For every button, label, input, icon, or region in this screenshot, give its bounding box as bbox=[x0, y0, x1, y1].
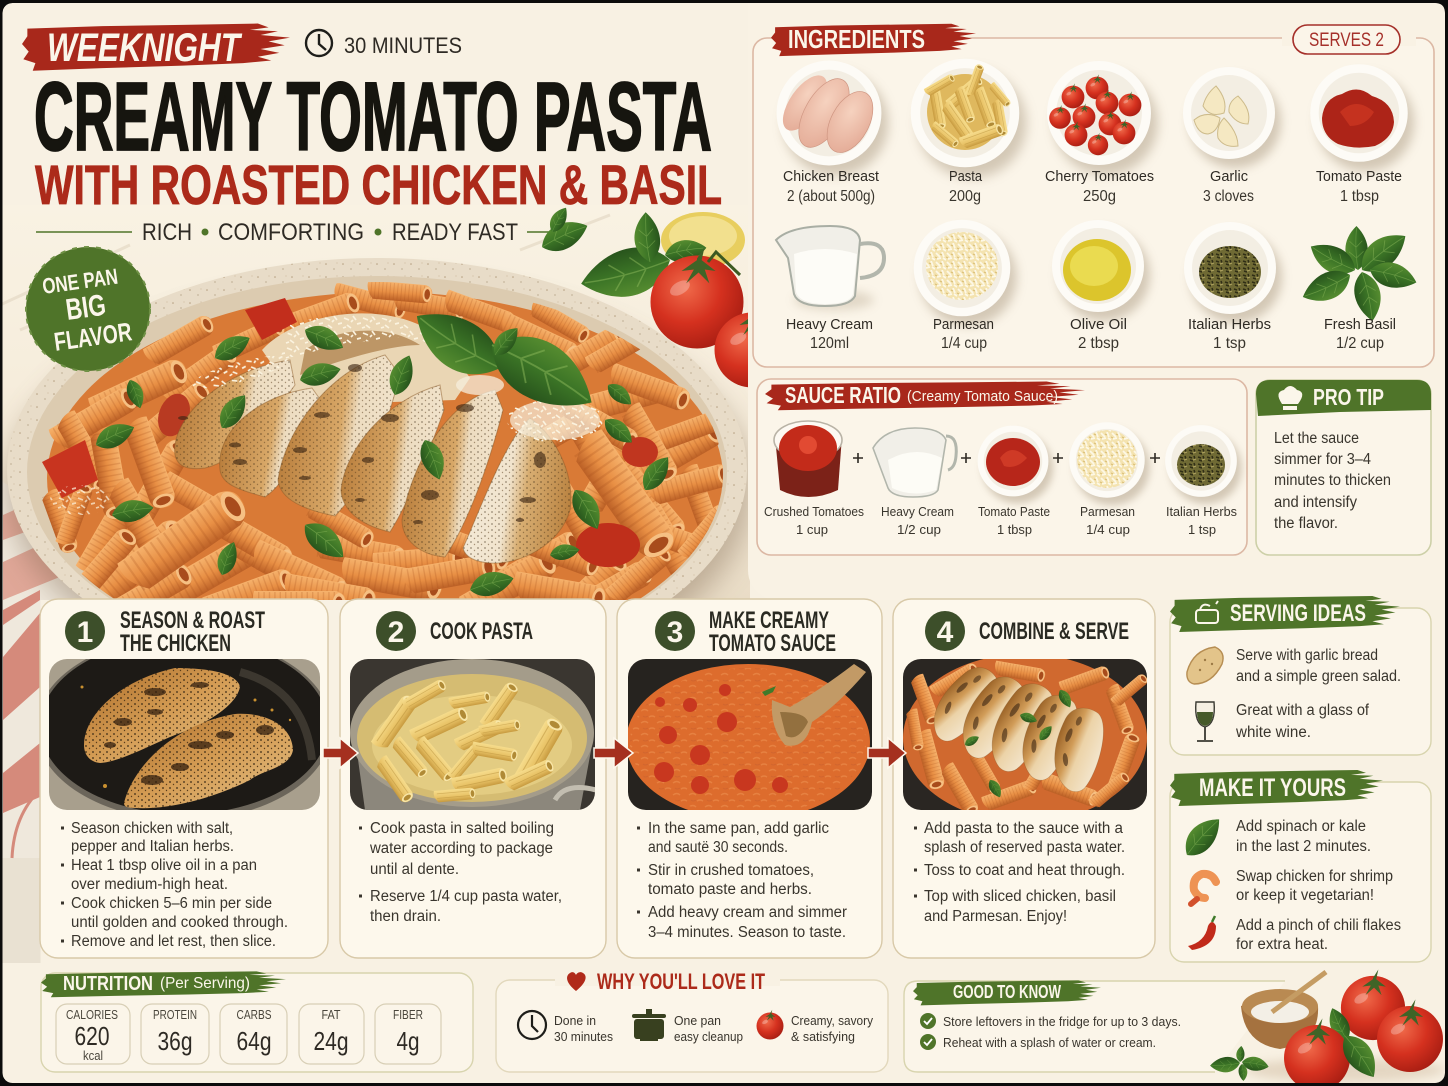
stat: protein: PROTEIN bbox=[153, 1008, 197, 1022]
sauce ratio heading bbox=[765, 382, 1085, 410]
ingredient: fresh basil bbox=[1298, 224, 1420, 352]
tagline bbox=[36, 204, 592, 258]
ingredient: pasta: Pasta bbox=[949, 168, 983, 185]
stat: calories: CALORIES bbox=[66, 1008, 118, 1022]
step 1 instructions: Remove and let rest, then slice. bbox=[71, 933, 276, 950]
tea towel bbox=[2, 482, 82, 600]
ingredient: cherry tomatoes: Cherry Tomatoes bbox=[1045, 168, 1154, 185]
stat: fiber: FIBER bbox=[393, 1008, 423, 1022]
step 1 instructions: pepper and Italian herbs. bbox=[71, 838, 234, 855]
reason: fast bbox=[554, 1013, 613, 1044]
badge: one pan big flavor: BIG bbox=[64, 289, 108, 327]
panel: why you'll love it bbox=[496, 969, 888, 1072]
ratio: tomato paste: 1 tbsp bbox=[997, 522, 1032, 537]
ingredient: parmesan bbox=[914, 220, 1017, 352]
reason: creamy: Creamy, savory bbox=[791, 1013, 873, 1028]
ratio: heavy cream: 1/2 cup bbox=[897, 522, 941, 537]
serving idea 1 text bbox=[1236, 647, 1401, 685]
step 2 instructions: until al dente. bbox=[370, 861, 459, 878]
nutrition heading: (Per Serving) bbox=[160, 975, 250, 992]
icon: clock bbox=[306, 30, 332, 56]
step 4 number bbox=[925, 611, 965, 651]
tip: shrimp: Swap chicken for shrimp bbox=[1236, 868, 1393, 885]
pro tip text: minutes to thicken bbox=[1274, 472, 1391, 489]
tagline: READY FAST bbox=[392, 219, 518, 246]
arrow: step 1 to 2 bbox=[323, 738, 358, 768]
ratio: parmesan bbox=[1069, 422, 1150, 537]
pro tip text: simmer for 3–4 bbox=[1274, 451, 1371, 468]
panel: step 1 bbox=[36, 599, 332, 958]
stat: fat bbox=[299, 1004, 364, 1064]
step 3 number: 3 bbox=[667, 616, 683, 649]
ratio: crushed tomatoes: 1 cup bbox=[796, 522, 828, 537]
step 2 photo: pasta in pot bbox=[350, 659, 596, 810]
ingredient: tomato paste bbox=[1310, 64, 1414, 205]
step 3 photo: sauce in pan bbox=[626, 659, 872, 820]
weeknight banner: WEEKNIGHT bbox=[47, 26, 243, 70]
tip: chili: Add a pinch of chili flakes bbox=[1236, 917, 1401, 934]
icon: chili bbox=[1188, 916, 1216, 950]
ingredient: parmesan: Parmesan bbox=[933, 316, 994, 333]
tip: chili: for extra heat. bbox=[1236, 936, 1328, 953]
step 2 instructions: then drain. bbox=[370, 908, 441, 925]
stat: calories bbox=[56, 1004, 130, 1064]
step 1 photo: chicken in pan bbox=[49, 659, 320, 810]
ingredient: parmesan: 1/4 cup bbox=[941, 335, 987, 352]
arrow: step 2 to 3 bbox=[594, 738, 633, 768]
tagline: RICH bbox=[142, 219, 192, 246]
icon: tomato bbox=[756, 1010, 784, 1040]
towel lower strip bbox=[2, 590, 40, 963]
pro tip text bbox=[1274, 430, 1391, 532]
stat: fat: FAT bbox=[322, 1008, 341, 1022]
serves badge: SERVES 2 bbox=[1309, 30, 1384, 51]
tip: spinach: Add spinach or kale bbox=[1236, 818, 1366, 835]
step 4 instructions: Toss to coat and heat through. bbox=[924, 862, 1125, 879]
icon: shrimp bbox=[1191, 874, 1216, 904]
icon: spinach leaf bbox=[1177, 811, 1228, 863]
step 3 instructions: Stir in crushed tomatoes, bbox=[648, 862, 814, 879]
step 3 instructions: 3–4 minutes. Season to taste. bbox=[648, 924, 846, 941]
serving idea 2 text bbox=[1235, 702, 1370, 741]
basil on top bbox=[416, 314, 498, 374]
step 4 instructions: Top with sliced chicken, basil bbox=[924, 888, 1116, 905]
icon: clock bbox=[518, 1011, 546, 1039]
step 2 number bbox=[376, 611, 416, 651]
icon: pot bbox=[632, 1009, 666, 1041]
step 1 number: 1 bbox=[77, 616, 93, 649]
ratio: tomato paste bbox=[978, 426, 1053, 537]
reason: one pan: One pan bbox=[674, 1013, 721, 1028]
panel: serving ideas bbox=[1170, 596, 1431, 755]
step 1 instructions bbox=[61, 820, 288, 950]
panel: pro tip bbox=[1256, 380, 1431, 555]
pro tip heading bbox=[1256, 380, 1431, 416]
stat: fiber bbox=[375, 1004, 441, 1064]
ingredient: heavy cream bbox=[776, 226, 884, 352]
why heading: WHY YOU'LL LOVE IT bbox=[597, 969, 765, 994]
ingredient: chicken breast: 2 (about 500g) bbox=[787, 188, 875, 205]
step 4 instructions bbox=[914, 820, 1125, 925]
ratio: italian herbs: Italian Herbs bbox=[1166, 504, 1237, 519]
plus signs bbox=[853, 453, 1160, 463]
stat: protein: 36g bbox=[158, 1026, 192, 1056]
serves badge bbox=[1293, 25, 1400, 54]
reason: creamy bbox=[791, 1013, 873, 1044]
step 1 number bbox=[65, 611, 105, 651]
ratio: crushed tomatoes: Crushed Tomatoes bbox=[764, 504, 864, 519]
stat: carbs bbox=[220, 1004, 287, 1064]
ingredient: cherry tomatoes bbox=[1045, 61, 1158, 205]
pro tip heading: PRO TIP bbox=[1313, 384, 1384, 410]
step 3 instructions: and sautë 30 seconds. bbox=[648, 839, 788, 856]
stat: calories: 620 bbox=[74, 1021, 110, 1051]
ingredient: heavy cream: Heavy Cream bbox=[786, 316, 873, 333]
step 4 instructions: Add pasta to the sauce with a bbox=[924, 820, 1123, 837]
icon: heart bbox=[567, 972, 586, 991]
bowl bbox=[7, 258, 747, 600]
stat: protein bbox=[141, 1004, 209, 1064]
step 1 instructions: Heat 1 tbsp olive oil in a pan bbox=[71, 857, 257, 874]
ingredient: tomato paste: 1 tbsp bbox=[1340, 188, 1379, 205]
time label: 30 MINUTES bbox=[344, 33, 462, 58]
ingredient: olive oil: Olive Oil bbox=[1070, 316, 1127, 333]
tip: shrimp bbox=[1236, 868, 1393, 904]
ingredient: olive oil: 2 tbsp bbox=[1078, 335, 1119, 352]
step 3 instructions: In the same pan, add garlic bbox=[648, 820, 829, 837]
good to know heading bbox=[913, 980, 1101, 1005]
chicken slices bbox=[170, 313, 580, 570]
step 3 heading: MAKE CREAMY bbox=[709, 607, 829, 634]
serving idea 2 text: Great with a glass of bbox=[1236, 702, 1370, 719]
serving idea 1 text: Serve with garlic bread bbox=[1236, 647, 1378, 664]
pro tip text: and intensify bbox=[1274, 494, 1357, 511]
panel: ingredients bbox=[753, 24, 1434, 367]
serving idea 2 text: white wine. bbox=[1235, 724, 1311, 741]
panel: sauce ratio bbox=[757, 379, 1247, 555]
ratio: italian herbs: 1 tsp bbox=[1188, 522, 1216, 537]
panel: good to know bbox=[904, 980, 1285, 1072]
tomato chunks bbox=[245, 298, 297, 340]
step 2 instructions: water according to package bbox=[369, 840, 553, 857]
panel: make it yours bbox=[1170, 770, 1431, 962]
step 3 heading: TOMATO SAUCE bbox=[709, 630, 836, 657]
ingredient: italian herbs: 1 tsp bbox=[1213, 335, 1246, 352]
stat: fiber: 4g bbox=[396, 1026, 420, 1056]
tip: shrimp: or keep it vegetarian! bbox=[1236, 887, 1374, 904]
ratio: heavy cream bbox=[873, 428, 956, 537]
reason: fast: Done in bbox=[554, 1013, 596, 1028]
tip: spinach bbox=[1236, 818, 1371, 855]
step 2 instructions: Cook pasta in salted boiling bbox=[370, 820, 554, 837]
right column backdrop bbox=[748, 3, 1445, 600]
step 4 number: 4 bbox=[937, 616, 954, 649]
pro tip text: the flavor. bbox=[1274, 515, 1338, 532]
serving idea 1 text: and a simple green salad. bbox=[1236, 668, 1401, 685]
ingredient: garlic: Garlic bbox=[1210, 168, 1248, 185]
tip: store leftovers: Store leftovers in the fridge for up to 3 days. bbox=[943, 1014, 1181, 1029]
step 1 instructions: over medium-high heat. bbox=[71, 876, 228, 893]
reason: one pan: easy cleanup bbox=[674, 1029, 743, 1044]
title: CREAMY TOMATO PASTA bbox=[34, 62, 712, 171]
ratio: italian herbs bbox=[1165, 425, 1242, 537]
ingredient: chicken breast: Chicken Breast bbox=[783, 168, 880, 185]
step 4 instructions: and Parmesan. Enjoy! bbox=[924, 908, 1067, 925]
tip: reheat: Reheat with a splash of water or cream. bbox=[943, 1035, 1156, 1050]
step 1 instructions: Season chicken with salt, bbox=[71, 820, 233, 837]
ingredient: italian herbs bbox=[1184, 222, 1282, 352]
make it yours heading: MAKE IT YOURS bbox=[1199, 774, 1346, 802]
reason: one pan bbox=[674, 1013, 743, 1044]
panel: step 4 bbox=[893, 599, 1155, 958]
ingredient: cherry tomatoes: 250g bbox=[1083, 188, 1116, 205]
hero photo: pasta bowl bbox=[2, 212, 750, 600]
badge: one pan big flavor bbox=[26, 247, 150, 371]
step 3 instructions bbox=[637, 820, 847, 941]
step 2 instructions bbox=[359, 820, 562, 925]
nutrition heading bbox=[41, 971, 286, 997]
arrow: step 3 to 4 bbox=[868, 738, 906, 768]
step 2 instructions: Reserve 1/4 cup pasta water, bbox=[370, 888, 562, 905]
step 1 heading: THE CHICKEN bbox=[120, 630, 231, 657]
step 4 heading: COMBINE & SERVE bbox=[979, 618, 1129, 645]
ratio: parmesan: Parmesan bbox=[1080, 504, 1135, 519]
sauce ratio heading: (Creamy Tomato Sauce) bbox=[907, 388, 1058, 405]
herbs and tomatoes behind bowl bbox=[581, 212, 748, 388]
step 4 photo: finished pasta bbox=[903, 659, 1147, 810]
badge: one pan big flavor: FLAVOR bbox=[52, 316, 134, 357]
ingredient: garlic: 3 cloves bbox=[1203, 188, 1254, 205]
step 1 instructions: Cook chicken 5–6 min per side bbox=[71, 895, 272, 912]
stat: fat: 24g bbox=[314, 1026, 348, 1056]
panel: step 2 bbox=[340, 599, 606, 958]
step 3 heading bbox=[709, 607, 836, 657]
stat: calories: kcal bbox=[83, 1049, 103, 1063]
tip: chili bbox=[1236, 917, 1401, 953]
step 1 instructions: until golden and cooked through. bbox=[71, 914, 288, 931]
panel: step 3 bbox=[617, 599, 882, 958]
reason: creamy: & satisfying bbox=[791, 1029, 855, 1044]
ratio: parmesan: 1/4 cup bbox=[1086, 522, 1130, 537]
badge: one pan big flavor: ONE PAN bbox=[41, 264, 119, 299]
tagline: COMFORTING bbox=[218, 219, 364, 246]
serving ideas heading bbox=[1170, 596, 1400, 632]
stat: carbs: 64g bbox=[236, 1026, 272, 1056]
ingredient: olive oil bbox=[1052, 220, 1150, 352]
ratio: crushed tomatoes bbox=[764, 421, 864, 537]
icon: wine glass bbox=[1196, 702, 1214, 741]
ingredient: heavy cream: 120ml bbox=[810, 335, 849, 352]
good to know heading: GOOD TO KNOW bbox=[953, 982, 1061, 1002]
icon: garlic bread bbox=[1187, 647, 1223, 684]
reason: fast: 30 minutes bbox=[554, 1029, 613, 1044]
step 1 heading: SEASON & ROAST bbox=[120, 607, 265, 634]
step 3 instructions: Add heavy cream and simmer bbox=[648, 904, 847, 921]
serving ideas heading: SERVING IDEAS bbox=[1230, 600, 1366, 627]
ingredients heading: INGREDIENTS bbox=[788, 24, 925, 54]
step 3 number bbox=[655, 611, 695, 651]
step 3 instructions: tomato paste and herbs. bbox=[648, 881, 812, 898]
stat: carbs: CARBS bbox=[236, 1008, 272, 1022]
decoration: tomatoes, salt bowl and basil bbox=[1209, 969, 1445, 1086]
ingredient: italian herbs: Italian Herbs bbox=[1188, 316, 1271, 333]
step 2 heading: COOK PASTA bbox=[430, 618, 533, 645]
step 2 number: 2 bbox=[388, 616, 404, 649]
pro tip text: Let the sauce bbox=[1274, 430, 1359, 447]
make it yours heading bbox=[1170, 770, 1383, 806]
step 4 instructions: splash of reserved pasta water. bbox=[924, 839, 1125, 856]
ingredient: tomato paste: Tomato Paste bbox=[1316, 168, 1402, 185]
ratio: heavy cream: Heavy Cream bbox=[881, 504, 954, 519]
ingredient: fresh basil: 1/2 cup bbox=[1336, 335, 1384, 352]
step 1 heading bbox=[120, 607, 265, 657]
ingredient: chicken breast bbox=[774, 61, 888, 205]
ingredient: pasta: 200g bbox=[949, 188, 981, 205]
ingredient: fresh basil: Fresh Basil bbox=[1324, 316, 1396, 333]
ingredient: garlic bbox=[1183, 67, 1281, 205]
tip: spinach: in the last 2 minutes. bbox=[1236, 838, 1371, 855]
subtitle: WITH ROASTED CHICKEN & BASIL bbox=[35, 153, 722, 216]
nutrition heading: NUTRITION bbox=[63, 973, 153, 995]
ingredient: pasta bbox=[911, 59, 1026, 205]
ratio: tomato paste: Tomato Paste bbox=[978, 504, 1050, 519]
sauce ratio heading: SAUCE RATIO bbox=[785, 382, 901, 408]
panel: nutrition bbox=[41, 971, 473, 1072]
